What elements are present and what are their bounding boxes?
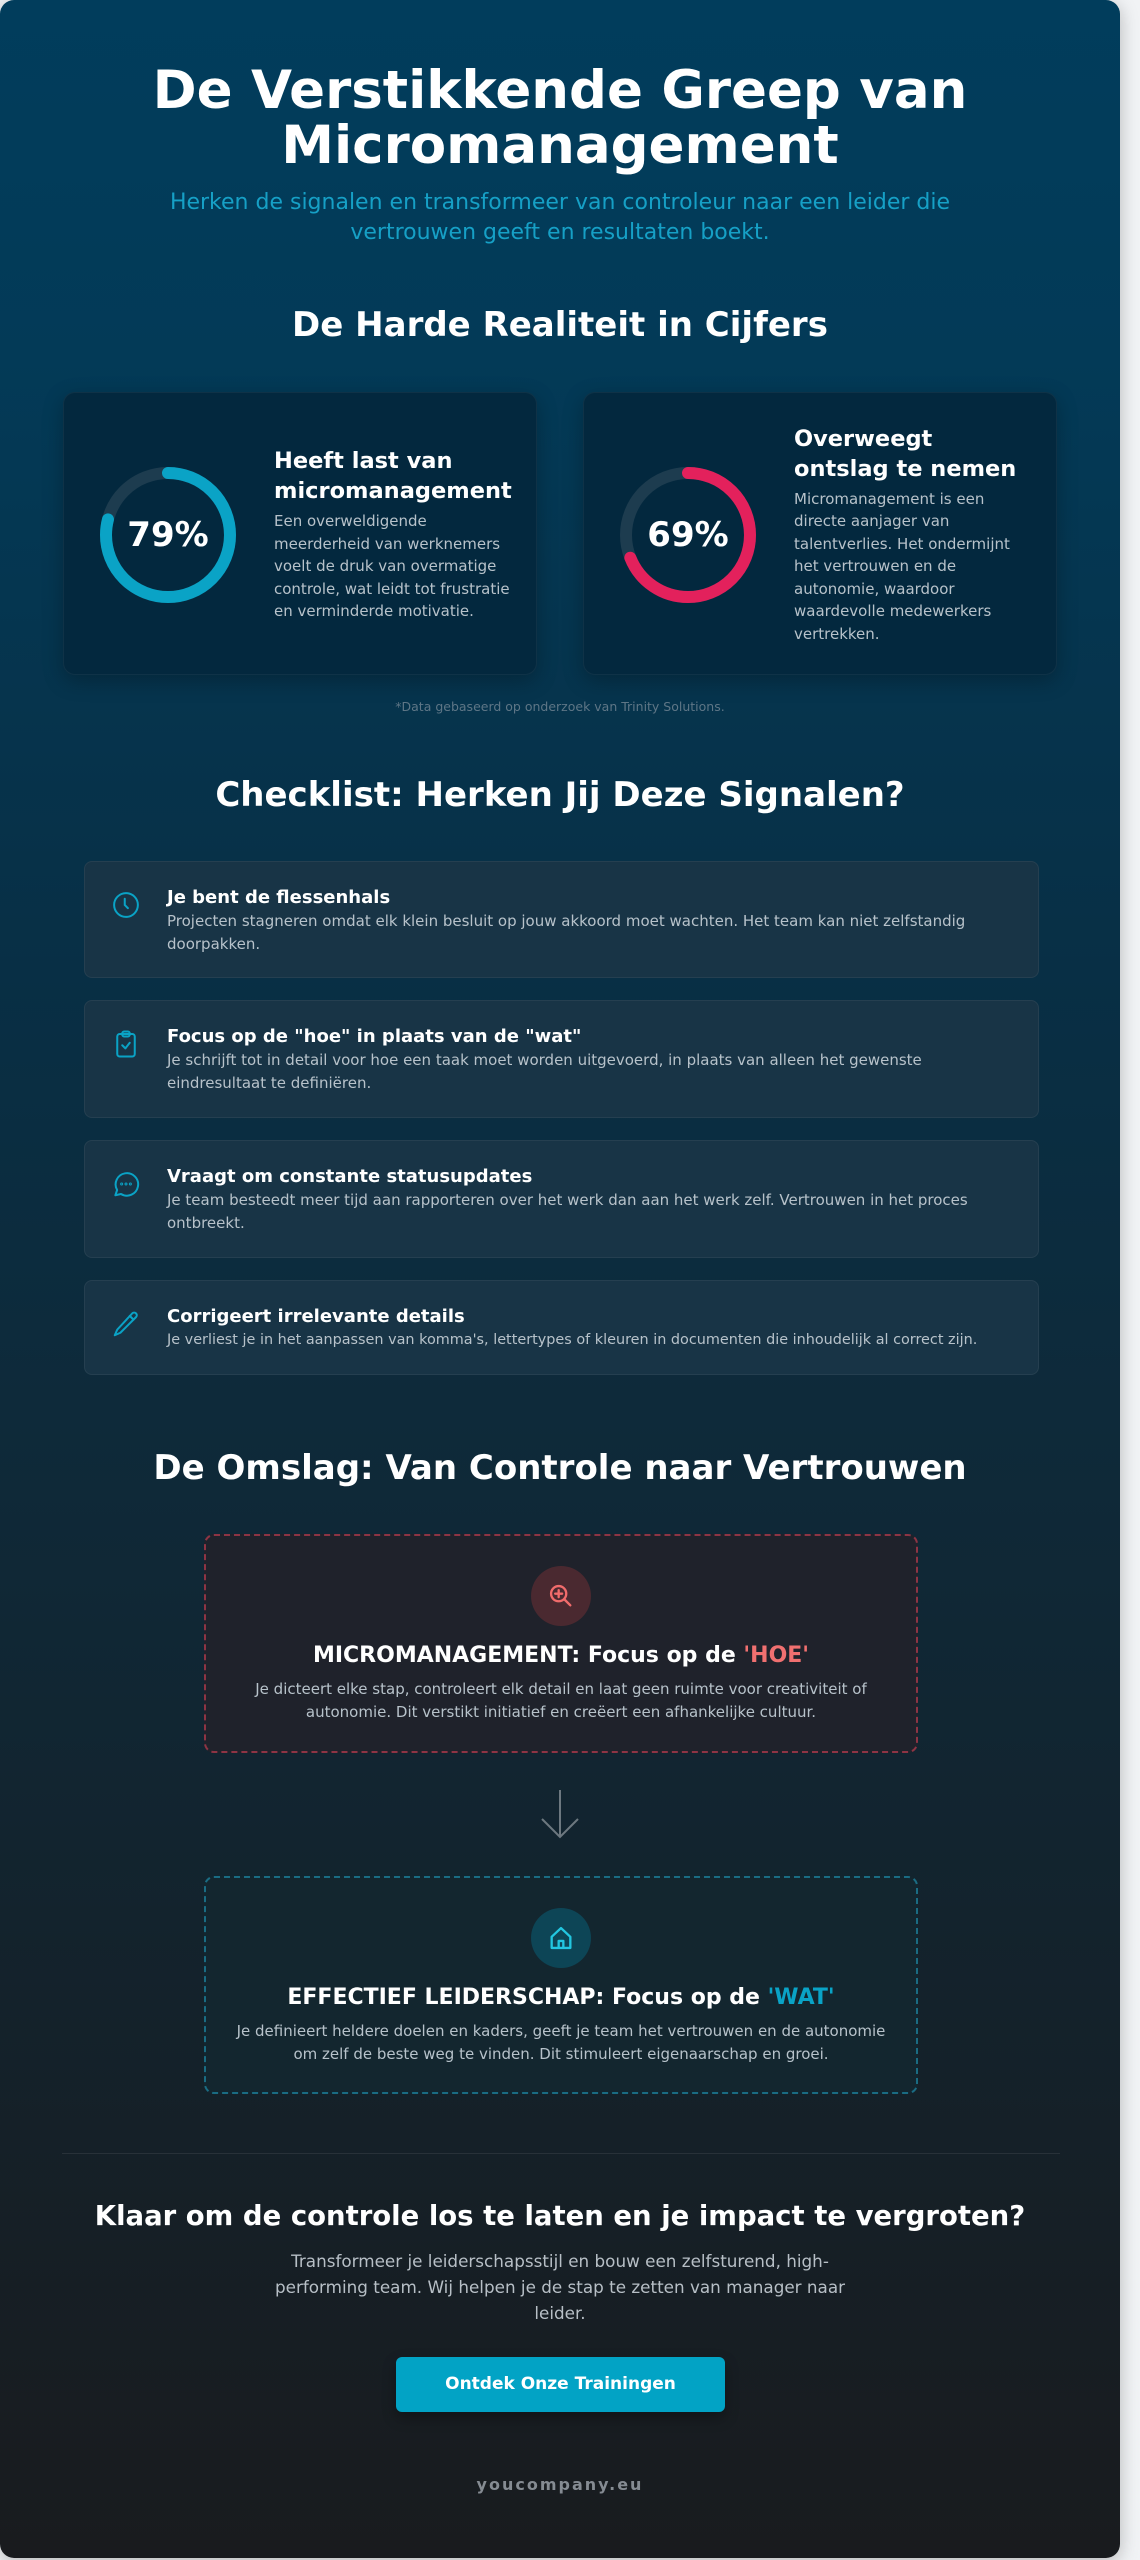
CTA text: Transformeer je leiderschapsstijl en bouw een zelfsturend, high-performing team. Wij helpen je de stap te zetten van manager naar leider.	[275, 2251, 845, 2323]
icon: clipboard check	[116, 1030, 136, 1058]
footer brand: youcompany.eu	[477, 2475, 643, 2494]
checklist item 1	[84, 861, 1039, 978]
icon: pencil	[114, 1312, 138, 1336]
checklist item 4	[84, 1280, 1039, 1375]
panel: micromanagement	[204, 1534, 918, 1753]
panel: micromanagement: Je dicteert elke stap, controleert elk detail en laat geen ruimte voor creativiteit of autonomie. Dit verstikt initiatief en creëert een afhankelijke cultuur.	[255, 1680, 867, 1721]
CTA heading: Klaar om de controle los te laten en je impact te vergroten?	[95, 2200, 1025, 2232]
panel: micromanagement: MICROMANAGEMENT: Focus op de 'HOE'	[313, 1643, 809, 1668]
donut chart 79%	[100, 467, 236, 603]
panel: effective leadership	[204, 1876, 918, 2094]
stat text	[274, 448, 512, 620]
panel: stat 69%	[583, 392, 1057, 675]
donut chart 69%	[620, 467, 756, 603]
heading: statistics: De Harde Realiteit in Cijfers	[292, 305, 828, 345]
heading: shift: De Omslag: Van Controle naar Vertrouwen	[153, 1448, 967, 1488]
stat text: Heeft last van micromanagement	[274, 448, 512, 504]
checklist item 4: Je verliest je in het aanpassen van komma's, lettertypes of kleuren in documenten die inhoudelijk al correct zijn.	[167, 1332, 977, 1348]
panel: effective leadership: Je definieert heldere doelen en kaders, geeft je team het vertrouwen en de autonomie om zelf de beste weg te vinden. Dit stimuleert eigenaarschap en groei.	[237, 2022, 885, 2063]
stat text: Micromanagement is een directe aanjager van talentverlies. Het ondermijnt het vertrouwen en de autonomie, waardoor waardevolle medewerkers vertrekken.	[794, 490, 1010, 643]
panel: effective leadership: EFFECTIEF LEIDERSCHAP: Focus op de 'WAT'	[287, 1985, 835, 2010]
icon: chat bubble	[114, 1172, 140, 1197]
footnote: *Data gebaseerd op onderzoek van Trinity Solutions.	[395, 699, 725, 714]
title: De Verstikkende Greep van	[153, 60, 967, 121]
CTA button	[396, 2357, 725, 2412]
panel: stat 79%	[63, 392, 537, 675]
stat text: Een overweldigende meerderheid van werknemers voelt de druk van overmatige controle, wat leidt tot frustratie en verminderde motivatie.	[274, 512, 510, 620]
checklist item 3	[84, 1140, 1039, 1258]
checklist item 2: Focus op de "hoe" in plaats van de "wat"	[167, 1026, 581, 1047]
checklist item 1: Projecten stagneren omdat elk klein besluit op jouw akkoord moet wachten. Het team kan niet zelfstandig doorpakken.	[167, 912, 965, 953]
checklist item 2	[84, 1000, 1039, 1118]
arrow down	[541, 1790, 579, 1838]
CTA button: Ontdek Onze Trainingen	[445, 2374, 676, 2394]
checklist item 2: Je schrijft tot in detail voor hoe een taak moet worden uitgevoerd, in plaats van alleen het gewenste eindresultaat te definiëren.	[167, 1051, 922, 1092]
donut chart 69%: 69%	[647, 515, 729, 555]
title: Micromanagement	[281, 115, 839, 176]
donut chart 79%: 79%	[127, 515, 209, 555]
icon: zoom-in	[531, 1566, 591, 1626]
icon: home	[531, 1908, 591, 1968]
title	[153, 60, 967, 176]
checklist item 1: Je bent de flessenhals	[167, 887, 390, 908]
checklist item 4: Corrigeert irrelevante details	[167, 1306, 465, 1327]
checklist item 3: Vraagt om constante statusupdates	[167, 1166, 532, 1187]
icon: clock	[113, 892, 139, 918]
heading: checklist: Checklist: Herken Jij Deze Signalen?	[215, 775, 905, 815]
stat text	[794, 426, 1016, 643]
stat text: ontslag te nemen	[794, 456, 1016, 482]
subtitle: Herken de signalen en transformeer van controleur naar een leider die vertrouwen geeft en resultaten boekt.	[170, 190, 950, 245]
checklist item 3: Je team besteedt meer tijd aan rapporteren over het werk dan aan het werk zelf. Vertrouwen in het proces ontbreekt.	[167, 1191, 968, 1232]
stat text: Overweegt	[794, 426, 932, 452]
